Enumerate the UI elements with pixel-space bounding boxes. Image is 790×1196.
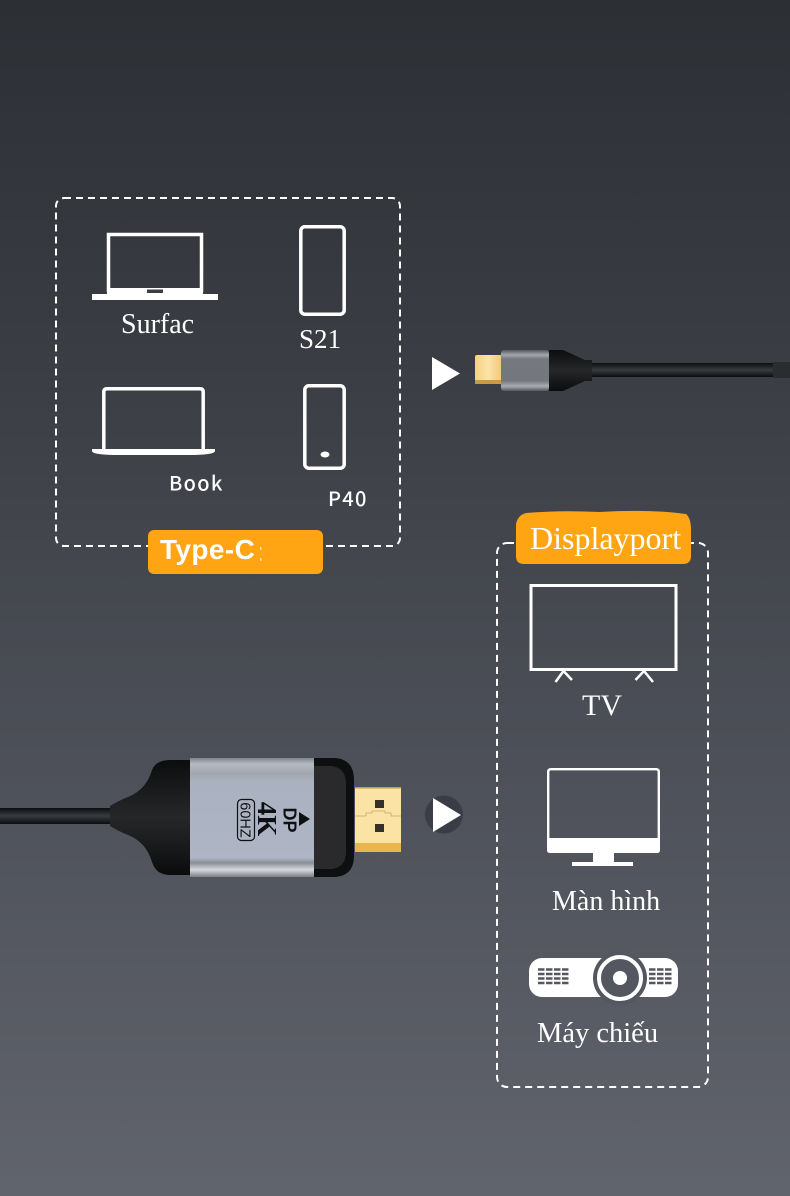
badge: Displayport: Displayport [530, 520, 681, 556]
label: Màn hình: Màn hình [552, 886, 660, 917]
label: Book: Book [169, 468, 224, 496]
icon: TV [531, 586, 676, 682]
Type-C cable connector [475, 350, 790, 391]
icon: projector [529, 951, 678, 1005]
shell marking: DP 4K 60HZ: 60HZ [236, 802, 252, 838]
label: S21: S21 [299, 324, 341, 354]
icon: S21 phone [301, 227, 344, 314]
left strain relief [110, 760, 190, 875]
badge: Displayport [516, 511, 691, 564]
arrow: from DP connector [425, 796, 463, 834]
badge: Type-C: Type-C [160, 534, 255, 565]
label: TV: TV [582, 689, 622, 722]
icon: MacBook laptop [92, 389, 215, 455]
icon: P40 phone [305, 386, 344, 468]
metal shell [190, 758, 314, 877]
cable [0, 808, 135, 824]
shell marking: DP 4K 60HZ [236, 800, 310, 840]
shell marking: DP 4K 60HZ: DP [280, 807, 300, 833]
icon: monitor [547, 769, 660, 866]
badge: Type-C [148, 530, 323, 574]
dashed frame: Displayport panel [497, 543, 708, 1087]
label: Máy chiếu: Máy chiếu [537, 1018, 658, 1049]
icon: Surface laptop [92, 234, 218, 300]
arrow: to Type-C connector [432, 357, 460, 390]
panel: Type-C devices [56, 198, 400, 574]
panel: Displayport devices [497, 511, 708, 1087]
gold plug [355, 787, 401, 852]
dashed frame: Type-C panel [56, 198, 400, 546]
right housing [312, 758, 354, 877]
label: P40: P40 [328, 483, 368, 512]
shell marking: DP 4K 60HZ: 4K [252, 802, 282, 836]
DP cable connector [0, 758, 401, 877]
label: Surfac: Surfac [121, 309, 194, 340]
